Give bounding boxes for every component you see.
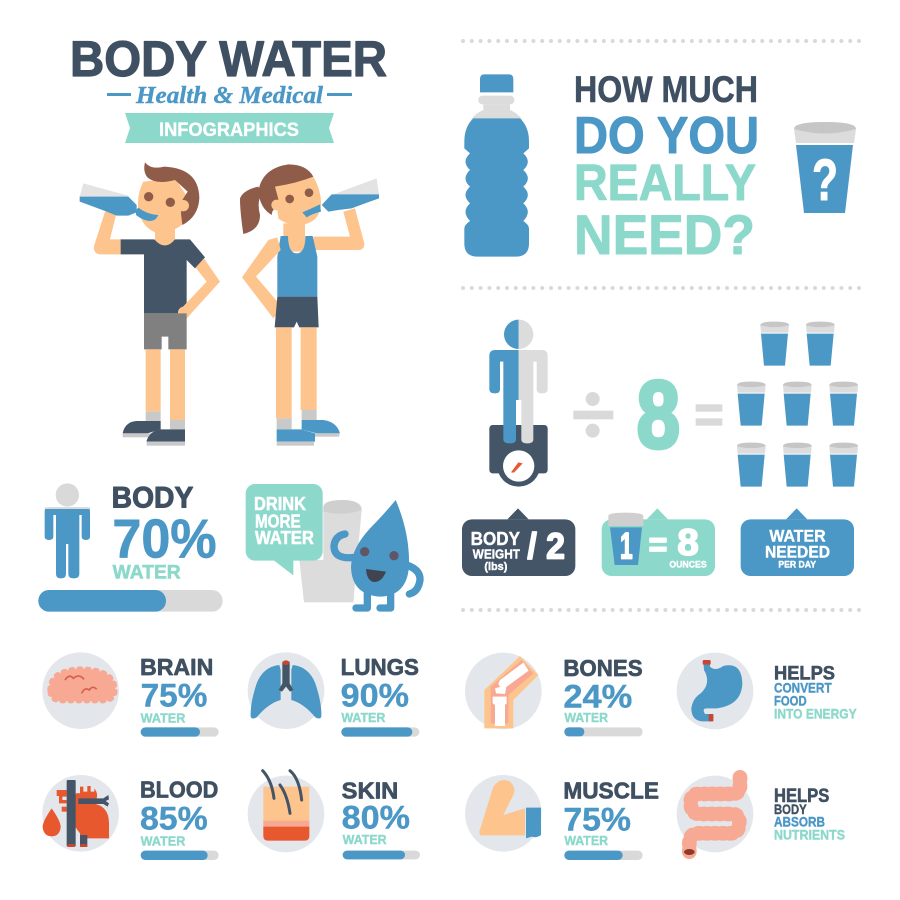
panel: body 70 percent water <box>38 481 223 612</box>
card: blood 85 percent: BLOOD <box>140 776 218 802</box>
illustration: drink more water mascot: WATER <box>255 527 314 548</box>
card: skin 80 percent: 80% <box>342 799 410 835</box>
illustration: drink more water mascot: MORE <box>255 510 301 531</box>
card: bones 24 percent: BONES <box>563 655 643 681</box>
card: muscle 75 percent <box>465 775 659 860</box>
illustration: drink more water mascot: DRINK <box>254 493 307 514</box>
heading: how much do you really need: REALLY <box>574 154 756 211</box>
left lower panels <box>38 481 420 860</box>
card: lungs 90 percent: 90% <box>341 678 409 714</box>
callout: body weight over 2: BODY <box>471 528 521 549</box>
callout: one glass equals 8 ounces <box>602 508 715 576</box>
card: blood 85 percent: 85% <box>140 800 208 836</box>
ribbon: infographics <box>125 113 334 143</box>
heading: how much do you really need: NEED? <box>574 203 755 266</box>
card: bones 24 percent: WATER <box>564 710 608 725</box>
heading: how much do you really need: HOW MUCH <box>574 69 758 110</box>
illustration: man drinking water <box>80 162 220 446</box>
card: brain 75 percent: 75% <box>141 678 207 714</box>
panel: body 70 percent water: WATER <box>113 562 181 583</box>
callout: one glass equals 8 ounces: = <box>649 527 667 564</box>
card: lungs 90 percent: LUNGS <box>341 654 419 680</box>
card: intestine helps body absorb nutrients: NUTRIENTS <box>774 826 845 842</box>
callout: body weight over 2: (lbs) <box>484 561 508 573</box>
card: blood 85 percent: WATER <box>141 834 186 849</box>
card: skin 80 percent <box>248 771 420 859</box>
callout: body weight over 2: / 2 <box>527 525 565 566</box>
callout: body weight over 2: WEIGHT <box>473 546 520 561</box>
card: skin 80 percent: WATER <box>343 832 387 847</box>
card: blood 85 percent <box>42 775 219 860</box>
card: intestine helps body absorb nutrients <box>677 776 845 855</box>
callout: water needed per day: PER DAY <box>778 559 817 569</box>
callout: one glass equals 8 ounces: 8 <box>677 522 699 563</box>
formula: body weight divided by eight equals glasses <box>462 320 858 576</box>
illustration: woman drinking water <box>240 164 379 446</box>
subtitle: health and medical: Health & Medical <box>135 83 323 109</box>
callout: body weight over 2 <box>462 508 575 576</box>
card: bones 24 percent: 24% <box>563 679 632 715</box>
card: stomach helps convert food into energy: INTO ENERGY <box>774 705 857 721</box>
divide sign <box>573 392 613 438</box>
icon: cup with question mark: ? <box>812 148 838 213</box>
dotted dividers <box>463 41 860 610</box>
card: stomach helps convert food into energy: HELPS <box>774 663 835 684</box>
card: brain 75 percent: BRAIN <box>140 654 213 680</box>
card: bones 24 percent <box>465 653 643 736</box>
card: muscle 75 percent: 75% <box>563 802 631 838</box>
icon: water bottle <box>464 74 529 257</box>
card: brain 75 percent: WATER <box>141 711 186 726</box>
card: intestine helps body absorb nutrients: BODY <box>774 801 807 817</box>
card: stomach helps convert food into energy: FOOD <box>774 693 807 709</box>
card: muscle 75 percent: WATER <box>564 833 608 848</box>
icon: cup with question mark <box>794 122 856 213</box>
callout: one glass equals 8 ounces: OUNCES <box>669 560 707 570</box>
callout: one glass equals 8 ounces: 1 <box>620 525 633 566</box>
equals sign <box>696 404 722 426</box>
panel: body 70 percent water: 70% <box>112 507 217 569</box>
number eight: 8 <box>637 361 680 468</box>
ribbon: infographics: INFOGRAPHICS <box>159 120 299 141</box>
title: BODY WATER <box>70 31 387 87</box>
card: brain 75 percent <box>42 652 219 737</box>
card: lungs 90 percent: WATER <box>341 710 386 725</box>
card: intestine helps body absorb nutrients: ABSORB <box>774 814 825 830</box>
card: stomach helps convert food into energy <box>677 653 857 729</box>
heading: how much do you really need <box>574 69 759 266</box>
icon: person on scale <box>489 320 548 487</box>
card: lungs 90 percent <box>248 652 419 737</box>
card: skin 80 percent: SKIN <box>342 777 398 803</box>
right lower panels <box>465 653 857 860</box>
callout: water needed per day <box>741 508 854 576</box>
card: muscle 75 percent: MUSCLE <box>563 777 659 803</box>
heading: how much do you really need: DO YOU <box>574 107 759 165</box>
panel: body 70 percent water: BODY <box>112 481 194 514</box>
eight glasses of water <box>737 322 858 487</box>
illustration: drink more water mascot <box>246 484 420 608</box>
card: intestine helps body absorb nutrients: HELPS <box>774 786 829 807</box>
callout: water needed per day: NEEDED <box>765 542 830 561</box>
card: stomach helps convert food into energy: CONVERT <box>774 680 832 696</box>
callout: water needed per day: WATER <box>769 527 826 546</box>
